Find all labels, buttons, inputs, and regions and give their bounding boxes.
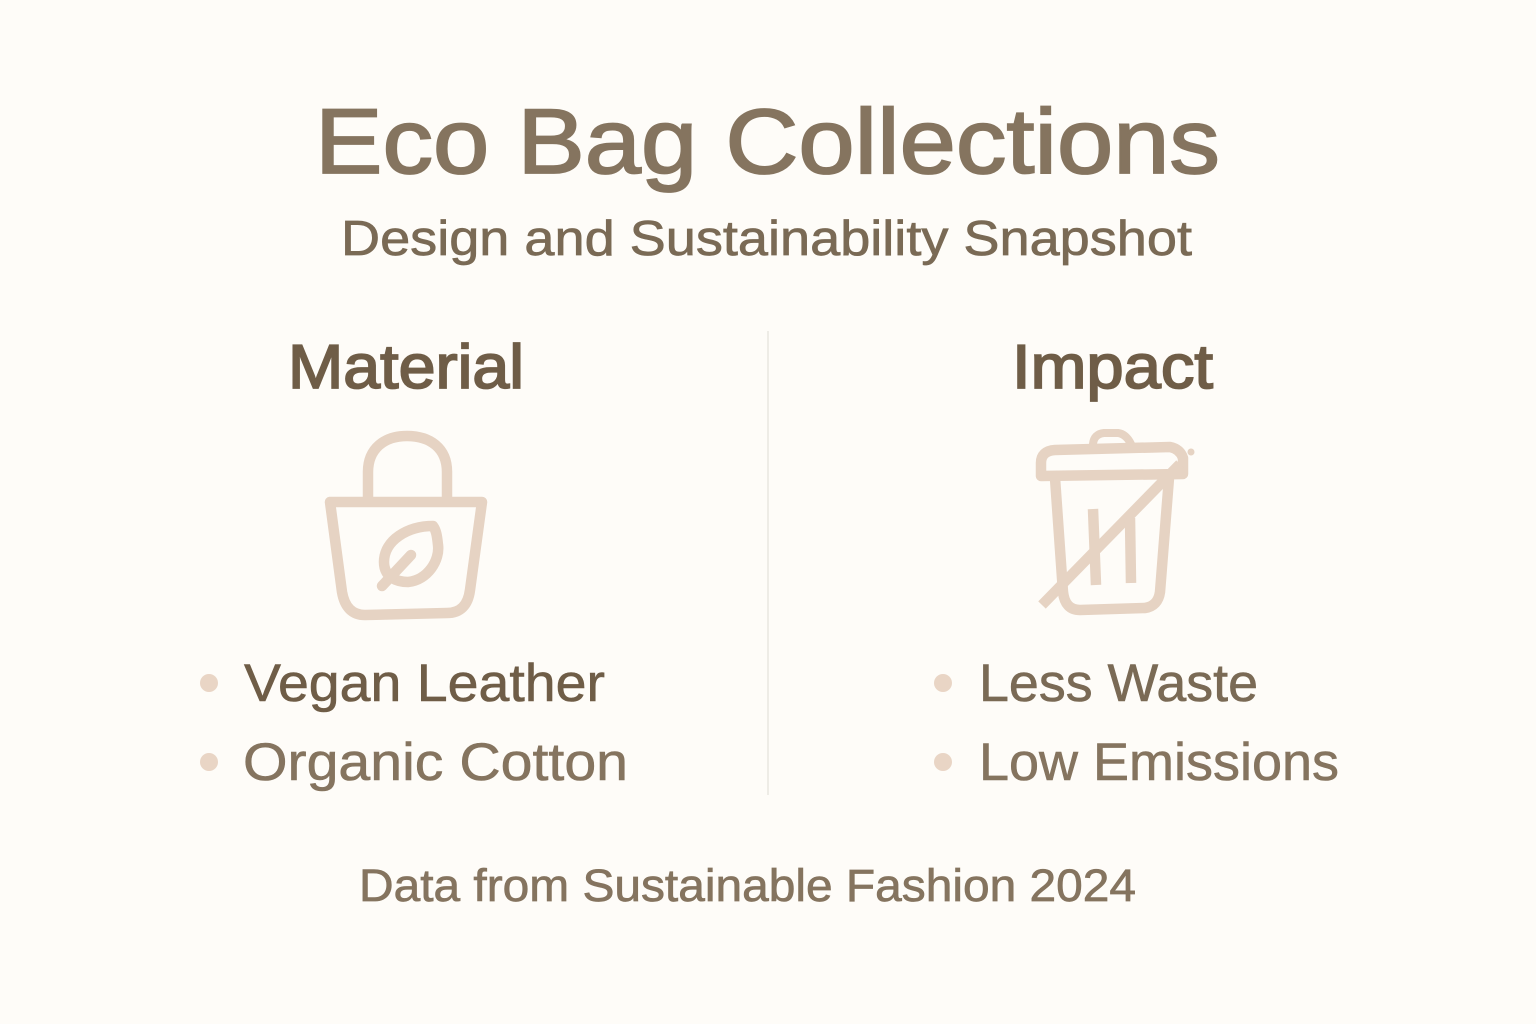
list item: organic cotton: Organic Cotton	[243, 733, 628, 792]
list item: low emissions: Low Emissions	[979, 733, 1339, 792]
icon: tote bag with leaf	[330, 436, 482, 615]
title: Eco Bag Collections	[315, 91, 1220, 193]
icon: crossed-out trash bin	[1041, 433, 1194, 610]
panel: material	[200, 333, 628, 792]
list item: vegan leather: Vegan Leather	[244, 654, 605, 713]
heading: impact: Impact	[1012, 333, 1213, 402]
panel: impact	[934, 333, 1339, 792]
footer source note: Data from Sustainable Fashion 2024	[359, 860, 1136, 911]
subtitle: Design and Sustainability Snapshot	[341, 212, 1192, 266]
heading: material: Material	[288, 333, 524, 402]
list item: less waste: Less Waste	[979, 654, 1258, 713]
